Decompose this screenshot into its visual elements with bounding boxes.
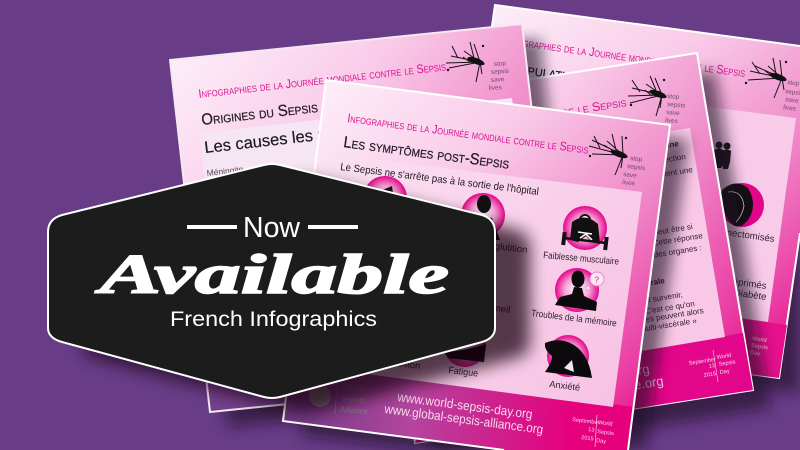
- date mark: [688, 350, 736, 382]
- body text: « C'est ce qu'on: [638, 299, 695, 317]
- date mark: Day: [750, 350, 761, 357]
- date mark: [750, 336, 768, 357]
- footer band: [415, 333, 753, 443]
- title: Origines du Sepsis: [201, 99, 319, 129]
- date mark: World: [716, 353, 732, 361]
- header text: Infographies de la Journée mondiale contre le Sepsis: [198, 59, 447, 101]
- icon: symptom 1: [363, 176, 407, 220]
- date mark: World: [752, 336, 767, 344]
- panel text: Méningite: [206, 164, 244, 178]
- date mark: Day: [596, 438, 607, 445]
- icon labels: Troubles de la mémoire: [531, 308, 617, 329]
- icon labels: Dépression: [372, 355, 421, 372]
- logo: sepsis: [667, 101, 685, 110]
- subheading: French Infographics: [170, 307, 377, 331]
- date mark: Sepsis: [718, 359, 736, 368]
- logo: stop: [787, 79, 800, 88]
- logo: sepsis: [491, 68, 509, 76]
- logo: lives: [783, 104, 796, 113]
- body text: mes peuvent alors: [638, 306, 704, 325]
- header text: Infographies de la Journée mondiale contre le Sepsis: [504, 33, 746, 80]
- logo: sepsis: [627, 163, 646, 172]
- rule left: [187, 225, 237, 229]
- logo: lives: [489, 84, 502, 92]
- header text: Infographies de la Journée mondiale contre le Sepsis: [336, 95, 627, 155]
- icon labels: [372, 232, 619, 394]
- title: Populations à risque: [507, 59, 648, 95]
- logo: [745, 58, 800, 113]
- logo: save: [491, 76, 505, 84]
- logo: [589, 134, 646, 188]
- date mark: Sepsis: [597, 429, 614, 437]
- logo: stop: [630, 155, 643, 164]
- body text: Le Sepsis une réponse immune: [559, 139, 680, 167]
- footer band: [198, 310, 562, 412]
- badge: [48, 164, 495, 398]
- footer urls: www.world-sepsis-day.org: [396, 389, 533, 422]
- rule right: [308, 225, 358, 229]
- risk labels: [693, 225, 775, 303]
- logo: lives: [665, 117, 678, 125]
- date mark: 13: [588, 427, 595, 434]
- logo: [446, 42, 509, 92]
- body text: peut être si: [653, 222, 694, 237]
- panel: [400, 128, 725, 385]
- logo: save: [785, 96, 800, 105]
- date mark: Day: [719, 368, 730, 376]
- card: middle, sepsis explanation: [336, 53, 771, 450]
- icon: memory problems: ?: [594, 276, 600, 284]
- body text: [559, 139, 704, 334]
- card: front, post-sepsis symptoms: [283, 80, 688, 450]
- icon: fatigue: [444, 325, 486, 367]
- icon labels: Troubles du sommeil: [422, 294, 511, 316]
- icon: memory problems: [555, 268, 604, 312]
- date mark: Sepsis: [751, 343, 768, 351]
- heading: Now: Now: [243, 212, 301, 244]
- icon: anxiety: [545, 335, 592, 378]
- logo: save: [623, 171, 637, 180]
- date mark: 2015: [581, 435, 594, 443]
- heading: Available: Available: [95, 244, 449, 306]
- footer urls: www.global-sepsis-alliance.org: [383, 401, 544, 437]
- logo: Global Sepsis Alliance: Sepsis: [341, 394, 365, 405]
- card: back right, populations at risk: [448, 5, 800, 393]
- body text: présentent une: [639, 165, 694, 182]
- date mark: 13: [708, 363, 715, 370]
- date mark: [572, 415, 614, 447]
- icon labels: Troubles de la déglutition: [422, 232, 528, 256]
- logo: Global Sepsis Alliance: [309, 382, 369, 416]
- panel: [308, 155, 642, 407]
- icon: muscle weakness: [561, 206, 609, 250]
- logo: lives: [622, 179, 635, 188]
- title: Les symptômes post-Sepsis: [342, 134, 510, 173]
- panel: [470, 80, 796, 322]
- date mark: September: [688, 357, 716, 367]
- body text: multi-viscérale »: [639, 316, 698, 334]
- date mark: 2015: [703, 371, 717, 379]
- risk labels: Immunodéprimés: [693, 271, 767, 292]
- footer urls: [383, 389, 544, 437]
- date mark: September: [572, 417, 600, 426]
- icon labels: Faiblesse musculaire: [543, 250, 619, 268]
- footer urls: www.global-sepsis-alliance.org: [486, 373, 664, 416]
- body text: rale: [650, 276, 666, 287]
- header text: Infographies de la Journée mondiale contre le Sepsis: [347, 111, 589, 157]
- panel: [200, 98, 535, 335]
- footer band: [448, 282, 787, 378]
- body text: infection: [655, 152, 686, 166]
- body text: ut survenir,: [643, 290, 683, 305]
- date mark: World: [598, 420, 613, 428]
- logo: stop: [494, 60, 507, 68]
- card: back left, origins of sepsis: [170, 24, 580, 427]
- body text: et des organes :: [644, 243, 702, 261]
- icon: spleen circle: [720, 183, 764, 227]
- logo: stop: [667, 93, 680, 101]
- footer band: [283, 362, 634, 450]
- risk labels: Splénectomisés: [707, 225, 775, 245]
- panel intro text: Le Sepsis ne s'arrête pas à la sortie de l'hôpital: [340, 161, 540, 198]
- footer urls: www.world-sepsis-day.org: [499, 361, 650, 400]
- body text: Cette réponse: [652, 231, 704, 248]
- icon: couple silhouette: [714, 142, 731, 169]
- icon: swallowing: [461, 193, 505, 240]
- icon labels: Anxiété: [549, 379, 581, 394]
- logo: Global Sepsis Alliance: Global: [342, 383, 366, 394]
- panel heading: Les causes les plus fréquentes: [203, 114, 431, 157]
- logo: [628, 76, 685, 125]
- logo: save: [666, 109, 680, 117]
- icon labels: Fatigue: [448, 365, 479, 380]
- badge shadow: [83, 179, 530, 413]
- risk labels: Diabète: [733, 288, 767, 303]
- logo: Global Sepsis Alliance: Alliance: [340, 405, 369, 416]
